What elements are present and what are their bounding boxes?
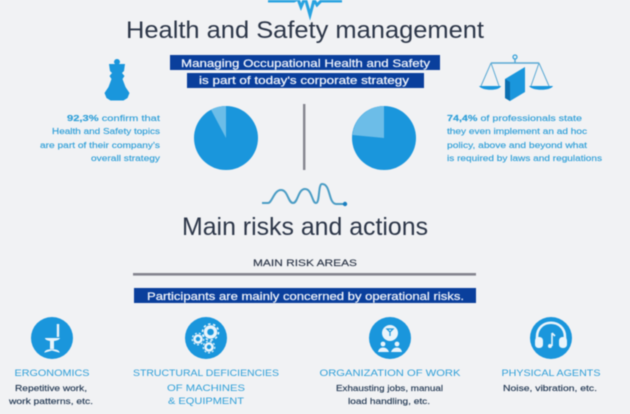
text block: 74.4% statistic bbox=[447, 113, 602, 163]
label: structural deficiencies bbox=[133, 368, 279, 407]
text block: 92.3% statistic: Health and Safety topics bbox=[52, 126, 160, 136]
text block: 92.3% statistic bbox=[40, 113, 161, 163]
rule under heading bbox=[133, 273, 476, 276]
text block: 74.4% statistic: 74,4% of professionals state bbox=[447, 113, 582, 123]
icon: people bbox=[369, 317, 411, 359]
risk: organization of work bbox=[320, 317, 461, 406]
label: ergonomics: ERGONOMICS bbox=[14, 368, 90, 379]
text block: 92.3% statistic: are part of their company's bbox=[40, 140, 160, 150]
icon: chess piece bbox=[104, 59, 130, 100]
callout: operational risks banner: Participants are mainly concerned by operational risks. bbox=[147, 291, 464, 303]
pie chart: 92.3% bbox=[194, 106, 258, 170]
risk: physical agents bbox=[502, 317, 600, 393]
label: structural deficiencies: OF MACHINES bbox=[167, 383, 245, 394]
callout: corporate strategy banner: is part of today's corporate strategy bbox=[199, 75, 410, 87]
description: ergonomics: work patterns, etc. bbox=[8, 396, 93, 406]
description: ergonomics: Repetitive work, bbox=[15, 383, 87, 393]
label: structural deficiencies: STRUCTURAL DEFICIENCIES bbox=[133, 368, 279, 379]
icon: wave arrow bbox=[262, 184, 347, 206]
text block: 74.4% statistic: policy, above and beyond what bbox=[447, 140, 588, 150]
text block: 92.3% statistic: 92,3% confirm that bbox=[67, 113, 161, 123]
label: structural deficiencies: & EQUIPMENT bbox=[168, 396, 244, 407]
text block: 92.3% statistic: overall strategy bbox=[91, 153, 161, 163]
description: organization of work: Exhausting jobs, manual bbox=[336, 383, 443, 393]
icon: scales with book bbox=[479, 55, 553, 101]
icon: headphones bbox=[530, 317, 572, 359]
divider between pies bbox=[303, 104, 305, 170]
icon: heartbeat line bbox=[268, 0, 342, 15]
text block: 74.4% statistic: they even implement an ad hoc bbox=[447, 126, 588, 136]
description: ergonomics bbox=[8, 383, 93, 406]
callout: operational risks banner bbox=[134, 288, 476, 303]
heading: Main risk areas: MAIN RISK AREAS bbox=[253, 258, 357, 269]
risk: ergonomics bbox=[8, 317, 93, 406]
text block: 74.4% statistic: is required by laws and regulations bbox=[447, 153, 602, 163]
title: Health and Safety management: Health and Safety management bbox=[126, 17, 484, 44]
pie chart: 74.4% bbox=[352, 106, 416, 170]
label: organization of work: ORGANIZATION OF WORK bbox=[320, 368, 461, 379]
icon: gears bbox=[185, 317, 227, 359]
heading: Main risks and actions: Main risks and actions bbox=[182, 213, 428, 241]
risk: structural deficiencies bbox=[133, 317, 279, 407]
description: physical agents: Noise, vibration, etc. bbox=[503, 383, 597, 393]
callout: corporate strategy banner bbox=[170, 55, 440, 88]
label: physical agents: PHYSICAL AGENTS bbox=[502, 368, 600, 379]
icon: chair bbox=[31, 317, 73, 359]
description: organization of work: load handling, etc. bbox=[348, 396, 430, 406]
description: organization of work bbox=[336, 383, 443, 406]
callout: corporate strategy banner: Managing Occupational Health and Safety bbox=[181, 58, 431, 70]
